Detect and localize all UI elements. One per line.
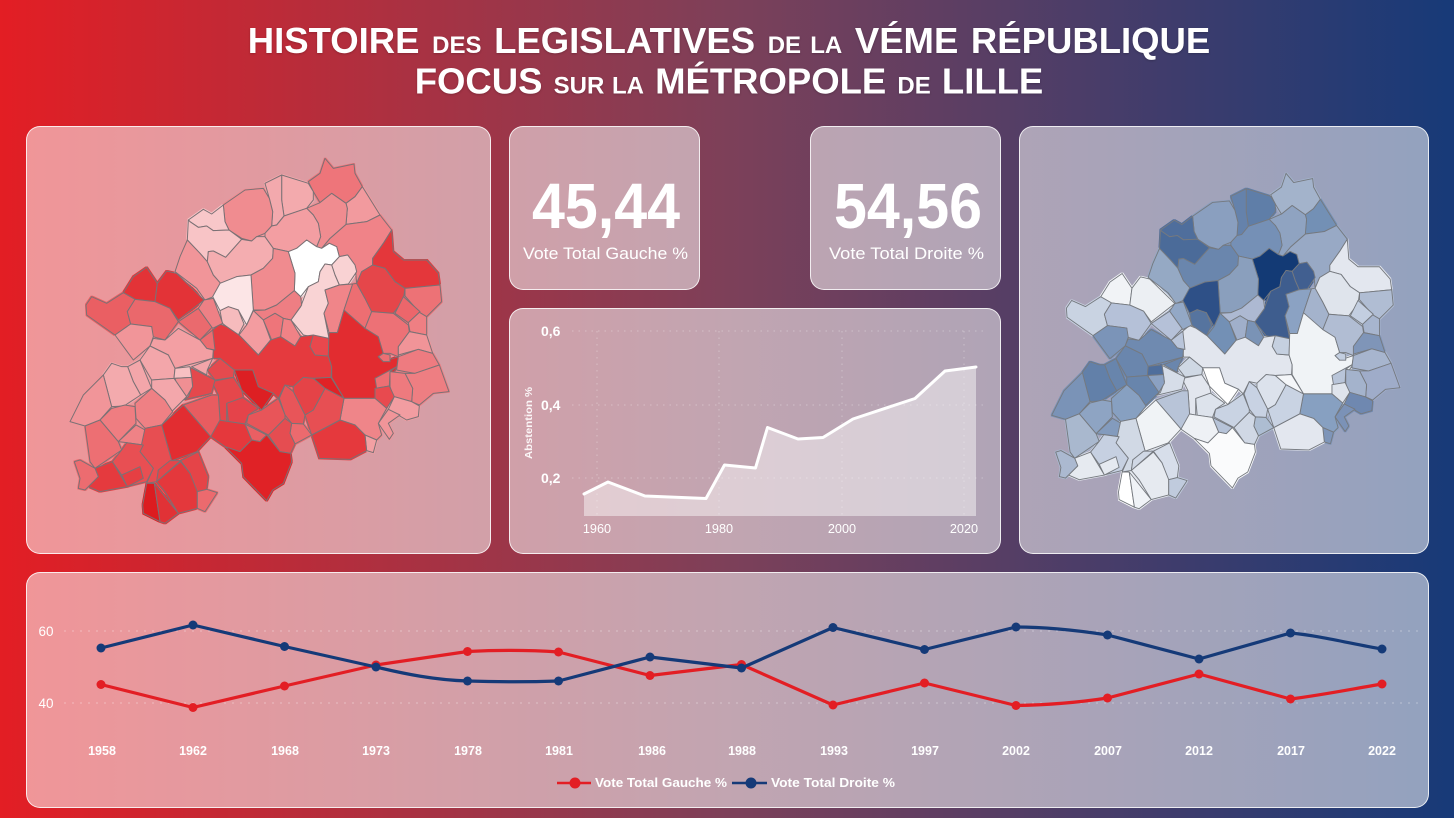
KPI: vote total gauche: Vote Total Gauche % xyxy=(523,245,688,263)
KPI: vote total droite: Vote Total Droite % xyxy=(829,245,984,263)
line chart: vote gauche vs droite: 60 xyxy=(38,624,54,639)
KPI: vote total gauche: 45,44 xyxy=(532,170,680,242)
x axis years: 1997 xyxy=(911,744,939,758)
area chart: abstention: 1980 xyxy=(705,522,733,536)
panel: left map (votes gauche) xyxy=(26,126,491,554)
panel: abstention chart xyxy=(509,308,1001,554)
panel: KPI gauche xyxy=(509,126,700,290)
area chart: abstention: 0,6 xyxy=(541,323,561,339)
area chart: abstention: Abstention % xyxy=(523,386,535,459)
x axis years: 1986 xyxy=(638,744,666,758)
legend: Vote Total Gauche % xyxy=(595,776,727,790)
area chart: abstention: 2020 xyxy=(950,522,978,536)
x axis years: 1973 xyxy=(362,744,390,758)
x axis years: 2002 xyxy=(1002,744,1030,758)
series: vote total gauche xyxy=(96,647,1386,712)
x axis years: 1962 xyxy=(179,744,207,758)
line chart: vote gauche vs droite: 40 xyxy=(38,696,54,711)
area chart: abstention: 2000 xyxy=(828,522,856,536)
legend: Vote Total Droite % xyxy=(771,776,895,790)
x axis years: 1988 xyxy=(728,744,756,758)
area chart: abstention: 0,2 xyxy=(541,470,561,486)
area chart: abstention: 1960 xyxy=(583,522,611,536)
title xyxy=(248,20,1210,102)
x axis years: 1993 xyxy=(820,744,848,758)
x axis years xyxy=(88,744,1396,758)
area chart: abstention: 0,4 xyxy=(541,397,561,413)
panel: right map (votes droite) xyxy=(1019,126,1429,554)
x axis years: 1981 xyxy=(545,744,573,758)
x axis years: 1978 xyxy=(454,744,482,758)
x axis years: 1968 xyxy=(271,744,299,758)
title: HISTOIRE DES LEGISLATIVES DE LA VÉME RÉPUBLIQUE xyxy=(248,20,1210,61)
x axis years: 1958 xyxy=(88,744,116,758)
x axis years: 2022 xyxy=(1368,744,1396,758)
legend xyxy=(557,776,895,790)
x axis years: 2007 xyxy=(1094,744,1122,758)
series: vote total droite xyxy=(96,620,1386,686)
KPI: vote total droite: 54,56 xyxy=(834,170,982,242)
panel: KPI droite xyxy=(810,126,1001,290)
x axis years: 2012 xyxy=(1185,744,1213,758)
panel: bottom line chart xyxy=(26,572,1429,808)
x axis years: 2017 xyxy=(1277,744,1305,758)
title: FOCUS SUR LA MÉTROPOLE DE LILLE xyxy=(415,60,1043,102)
